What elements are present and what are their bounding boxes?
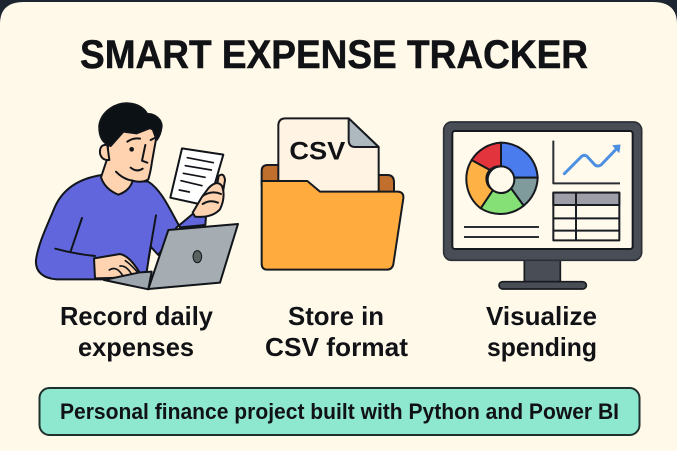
illustration: CSV file in folder: [262, 118, 403, 270]
laptop lid: [148, 224, 238, 289]
line chart trend arrow: [564, 145, 620, 174]
neck and face: [101, 120, 157, 195]
laptop logo: [193, 251, 202, 263]
ear: [100, 145, 109, 160]
line chart axes: [553, 141, 620, 183]
document: [278, 118, 379, 192]
sweater: [36, 175, 206, 279]
illustration: dashboard monitor: [444, 122, 642, 289]
hand holding receipt: [193, 183, 224, 217]
caption: store in CSV format: Store in: [288, 301, 384, 331]
thumb behind receipt: [217, 175, 225, 190]
folder back: [262, 165, 394, 192]
monitor base: [499, 282, 586, 289]
sleeve folds: [55, 215, 156, 260]
caption: record daily expenses: Record daily: [60, 301, 214, 331]
footer banner: [40, 388, 640, 435]
monitor frame: [444, 122, 642, 260]
caption: visualize spending: spending: [487, 332, 597, 362]
fingers: [203, 192, 221, 204]
caption: visualize spending: [486, 301, 597, 362]
monitor stand: [524, 258, 560, 282]
face details: [116, 137, 156, 181]
caption: visualize spending: Visualize: [486, 301, 597, 331]
laptop keyboard base: [104, 272, 152, 289]
title: SMART EXPENSE TRACKER: [80, 33, 588, 77]
caption: store in CSV format: CSV format: [265, 332, 408, 362]
CSV label: CSV: [289, 138, 345, 166]
footer banner: Personal finance project built with Python and Power BI: [60, 399, 619, 424]
donut chart: [466, 143, 538, 214]
receipt: [170, 148, 223, 206]
data table: [553, 193, 619, 240]
typing hand: [94, 254, 140, 278]
folder front: [262, 181, 403, 270]
caption: record daily expenses: [60, 301, 214, 362]
caption: store in CSV format: [265, 301, 408, 362]
document folded corner: [349, 118, 379, 147]
monitor screen: [452, 131, 633, 249]
text lines: [464, 227, 539, 237]
hair: [99, 103, 162, 146]
caption: record daily expenses: expenses: [78, 332, 194, 362]
illustration: person recording expenses on laptop: [36, 103, 238, 289]
